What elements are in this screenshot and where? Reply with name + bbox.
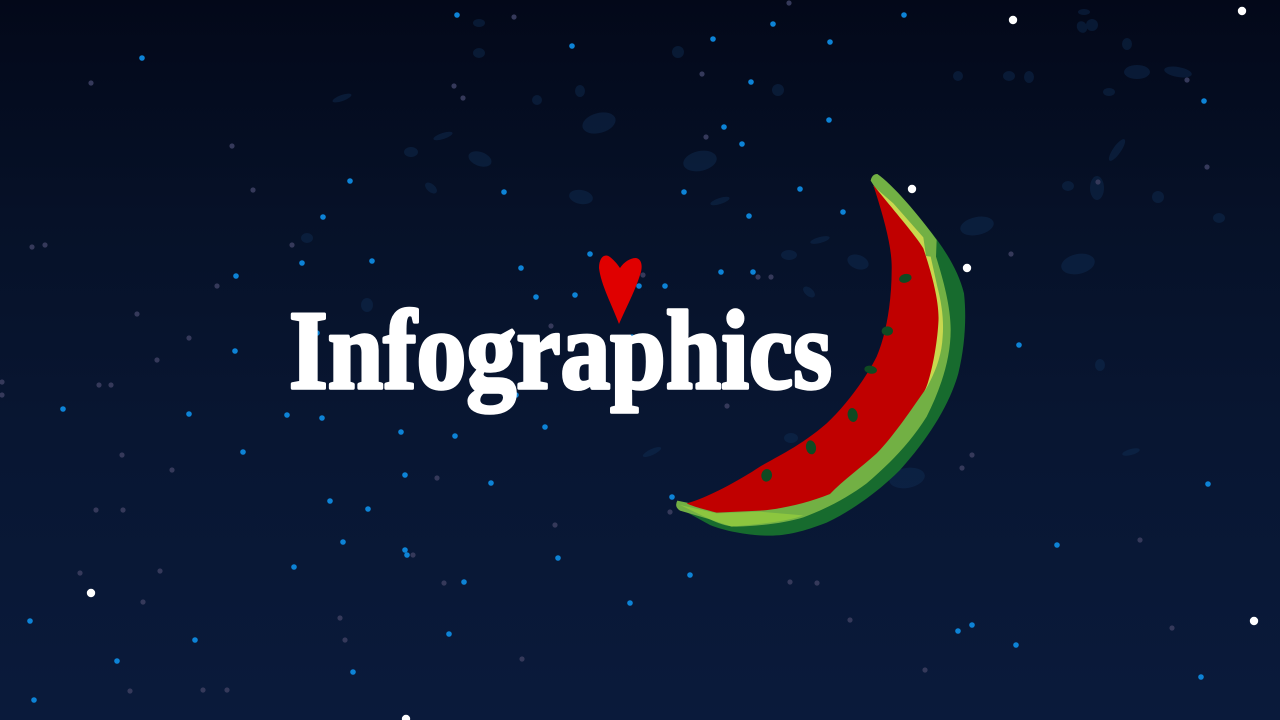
watermelon red flesh	[687, 185, 939, 513]
title: Infographics	[289, 289, 832, 413]
watermelon light green rind	[676, 174, 951, 527]
watermelon dark green rind	[677, 177, 965, 536]
icon: heart	[599, 255, 642, 324]
faint blobs	[301, 9, 1225, 491]
watermelon lower light band	[680, 505, 803, 527]
icon: watermelon crescent moon	[676, 174, 965, 536]
watermelon seeds	[760, 273, 913, 482]
watermelon yellow flesh edge	[873, 186, 943, 410]
